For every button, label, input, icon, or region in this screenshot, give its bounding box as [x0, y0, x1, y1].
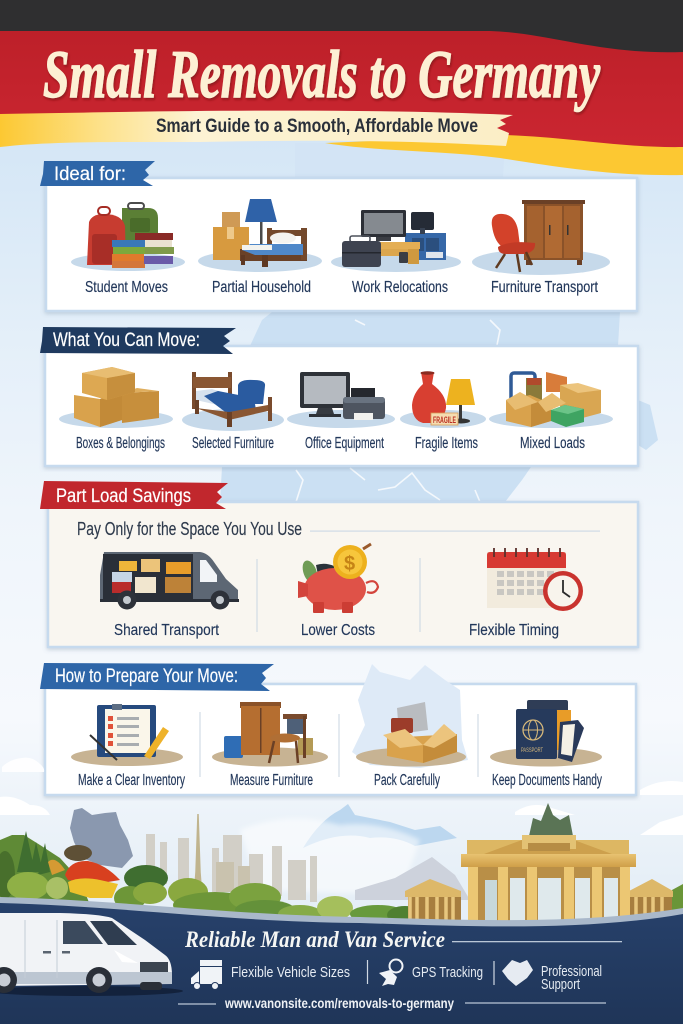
gate body	[467, 840, 629, 854]
label: Pack Carefully	[374, 772, 440, 789]
icon: work relocations	[331, 210, 461, 272]
icon: piggy bank	[280, 544, 394, 613]
feature: gps: GPS Tracking	[412, 964, 483, 981]
header flag banner	[0, 0, 683, 175]
feature: professional support: Support	[541, 976, 581, 993]
icon: measure furniture	[212, 702, 328, 766]
left wing	[405, 879, 461, 921]
label: Shared Transport	[114, 622, 220, 639]
label: Work Relocations	[352, 279, 448, 296]
label: Office Equipment	[305, 435, 384, 452]
dividers	[257, 558, 420, 632]
label: Selected Furniture	[192, 435, 274, 452]
icon: calendar and clock	[432, 548, 592, 611]
trees	[0, 831, 683, 924]
right wing	[629, 879, 673, 921]
feature: professional support	[541, 963, 602, 993]
icon: bed	[182, 372, 284, 431]
tag: ideal for: Ideal for:	[54, 164, 126, 185]
icon: piggy bank: $	[344, 553, 355, 575]
panel: what you can move	[40, 327, 638, 466]
blue cloud sky	[303, 804, 457, 848]
label: Furniture Transport	[491, 279, 599, 296]
feature: professional support: Professional	[541, 963, 602, 980]
dividers	[200, 712, 478, 777]
icon: pack carefully	[356, 702, 466, 766]
label: Make a Clear Inventory	[78, 772, 185, 789]
label: Keep Documents Handy	[492, 772, 602, 789]
city skyline	[146, 814, 317, 902]
red band	[0, 31, 683, 150]
icon: office equipment	[287, 372, 395, 428]
footer heading: Reliable Man and Van Service	[184, 927, 445, 952]
icon: gps	[379, 960, 402, 986]
icon: shared transport van	[74, 552, 252, 610]
panel: ideal for	[40, 161, 637, 311]
label: Boxes & Belongings	[76, 435, 165, 452]
label: Measure Furniture	[230, 772, 313, 789]
icon: furniture transport	[472, 200, 610, 275]
website url: www.vanonsite.com/removals-to-germany	[224, 995, 454, 1011]
icon: boxes	[59, 367, 173, 428]
yellow band right	[325, 135, 683, 175]
tag: how to prepare: How to Prepare Your Move:	[55, 666, 238, 687]
icon: fragile items: FRAGILE	[433, 415, 456, 425]
tag: part load savings: Part Load Savings	[56, 486, 191, 507]
black band	[0, 0, 683, 60]
quadriga	[529, 803, 573, 836]
subtitle: Smart Guide to a Smooth, Affordable Move	[156, 116, 478, 137]
icon: student moves	[71, 203, 185, 271]
label: Flexible Timing	[469, 622, 559, 639]
heading: pay only: Pay Only for the Space You You Use	[77, 519, 302, 539]
tag: how to prepare	[40, 663, 274, 691]
icon: fragile items	[400, 371, 486, 428]
separators	[368, 960, 494, 985]
footer band	[0, 897, 683, 1024]
icon: handshake	[502, 960, 533, 986]
label: Fragile Items	[415, 435, 478, 452]
label: Partial Household	[212, 279, 311, 296]
pale clouds near city	[240, 819, 420, 895]
label: Student Moves	[85, 279, 168, 296]
icon: mixed loads	[489, 372, 613, 428]
label: Lower Costs	[301, 622, 375, 639]
label: Mixed Loads	[520, 435, 585, 452]
icon: clipboard inventory	[71, 704, 183, 766]
icon: partial household	[198, 199, 322, 272]
mountains	[355, 857, 470, 900]
icon: truck	[191, 960, 222, 990]
panel: how to prepare	[40, 663, 636, 795]
icon: white van	[0, 913, 183, 996]
clouds	[0, 758, 683, 835]
tag: ideal for	[40, 161, 155, 186]
rivers on map	[296, 320, 500, 502]
germany silhouette	[70, 808, 133, 868]
feature: flexible vehicle sizes: Flexible Vehicle Sizes	[231, 964, 350, 981]
yellow ribbon with subtitle	[0, 111, 513, 147]
icon: documents	[490, 700, 602, 766]
icon: documents: PASSPORT	[521, 748, 543, 754]
background map of Germany	[220, 143, 658, 502]
tag: part load savings	[40, 481, 228, 509]
panel: part load savings	[40, 481, 638, 647]
tag: what you can move: What You Can Move:	[53, 330, 200, 351]
brandenburg gate	[405, 803, 673, 921]
faded map behind panel	[352, 664, 468, 768]
